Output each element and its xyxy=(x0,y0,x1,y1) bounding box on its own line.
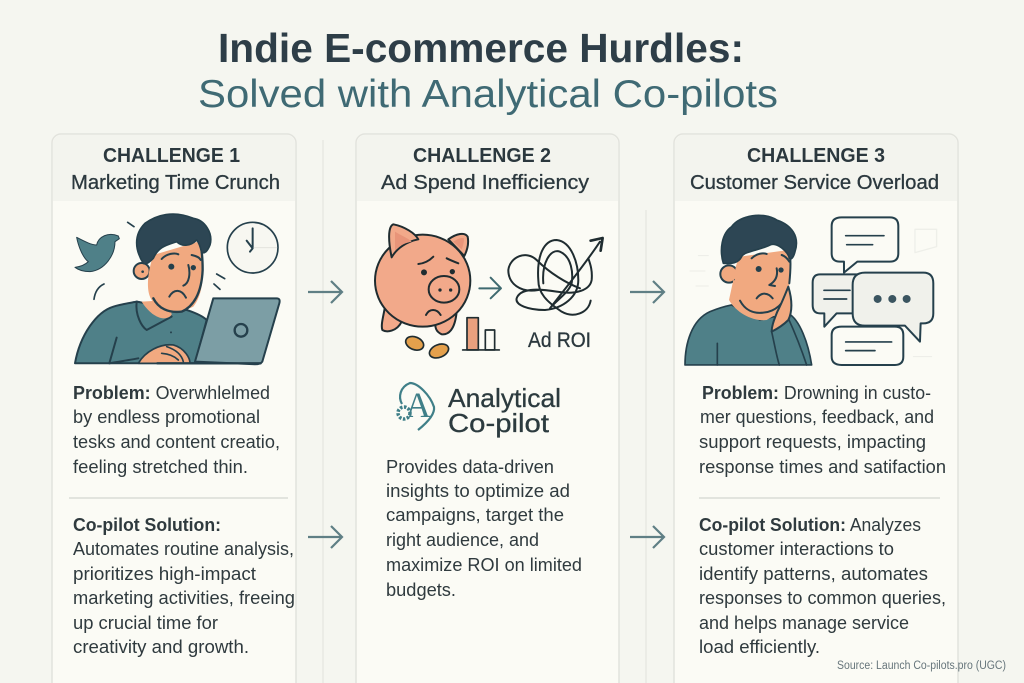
text: challenge 1 solution: marketing activities, freeing xyxy=(73,587,295,608)
text: challenge 3 problem: response times and satifaction xyxy=(699,456,946,477)
arrow: challenge 1 to 2, top xyxy=(308,281,342,303)
text: challenge 3 solution: identify patterns, automates xyxy=(699,563,928,584)
icon: laptop xyxy=(157,298,280,364)
panel: challenge 3 xyxy=(674,134,958,683)
text: challenge 3 solution xyxy=(699,514,946,657)
arrow: challenge 1 to 2, bottom xyxy=(308,526,342,548)
shirt xyxy=(75,302,207,363)
text: challenge 3 solution: customer interactions to xyxy=(699,538,894,559)
illustration: sad piggy bank to tangled ad ROI xyxy=(375,224,603,361)
icon: chat bubbles xyxy=(813,217,933,365)
text: challenge 1 problem: feeling stretched thin. xyxy=(73,456,248,477)
text: challenge 3 problem xyxy=(699,382,946,477)
text: challenge 1 solution: Automates routine analysis, xyxy=(73,538,294,559)
collar xyxy=(136,302,172,330)
arrow: challenge 2 to 3, top xyxy=(630,281,664,303)
title xyxy=(198,25,778,116)
text: challenge 3 solution: load efficiently. xyxy=(699,636,820,657)
panel: challenge 1 xyxy=(52,134,296,683)
text: challenge 1 solution: up crucial time for xyxy=(73,612,218,633)
text: challenge 1 problem xyxy=(73,382,280,477)
hair xyxy=(137,214,211,264)
arrow: piggy to scribble xyxy=(479,278,501,298)
text: challenge 1 solution: creativity and growth. xyxy=(73,636,249,657)
text: challenge 2 solution: right audience, and xyxy=(386,529,539,550)
text: challenge 3 problem: mer questions, feedback, and xyxy=(700,406,934,427)
text: challenge 1 problem: by endless promotional xyxy=(73,406,260,427)
hand on cheek xyxy=(772,287,791,332)
neck and face xyxy=(729,280,783,320)
text: challenge 2 solution: Provides data-driven xyxy=(386,456,554,477)
panel header: challenge 3: CHALLENGE 3 xyxy=(747,145,885,167)
text: challenge 3 solution: and helps manage service xyxy=(699,612,909,633)
panel header: challenge 2: Ad Spend Inefficiency xyxy=(381,172,589,194)
ear xyxy=(134,263,150,279)
text: challenge 1 solution: Co-pilot Solution: xyxy=(73,514,221,535)
text: challenge 1 problem: tesks and content creatio, xyxy=(73,431,280,452)
text: challenge 1 solution xyxy=(73,514,295,657)
logo: analytical co-pilot: Analytical xyxy=(448,383,561,413)
face details xyxy=(752,253,789,298)
illustration: overwhelmed support person xyxy=(685,215,937,365)
panel: challenge 2 xyxy=(356,134,619,683)
icon: falling coins xyxy=(404,334,451,361)
icon: head with letter A: A xyxy=(405,385,431,425)
shirt xyxy=(685,305,812,365)
text: challenge 1 solution: prioritizes high-impact xyxy=(73,563,256,584)
icon: bird xyxy=(75,234,119,272)
source note: Source: Launch Co-pilots.pro (UGC) xyxy=(837,660,1006,672)
label: Ad ROI: Ad ROI xyxy=(528,329,591,352)
icon: piggy bank xyxy=(375,224,470,334)
text: challenge 3 solution: Co-pilot Solution: Analyzes xyxy=(699,514,921,535)
text: challenge 3 solution: responses to common queries, xyxy=(699,587,946,608)
text: challenge 2 solution: campaigns, target the xyxy=(386,504,564,525)
logo: analytical co-pilot xyxy=(398,383,561,438)
illustration: stressed marketer at laptop xyxy=(75,214,280,364)
icon: head with letter A xyxy=(398,383,434,430)
panel header: challenge 1: CHALLENGE 1 xyxy=(103,145,240,167)
text: challenge 1 problem: Problem: Overwhlelmed xyxy=(73,382,270,403)
face details xyxy=(162,254,201,298)
panel header: challenge 2: CHALLENGE 2 xyxy=(413,145,551,167)
face xyxy=(148,242,203,311)
logo: analytical co-pilot: Co-pilot xyxy=(448,408,550,438)
text: challenge 3 problem: Problem: Drowning in custo- xyxy=(702,382,931,403)
text: challenge 2 solution: budgets. xyxy=(386,579,456,600)
hand xyxy=(138,345,190,363)
icon: clock xyxy=(227,222,278,273)
arrow: challenge 2 to 3, bottom xyxy=(630,526,664,548)
ear xyxy=(720,265,738,283)
text: challenge 2 solution: maximize ROI on limited xyxy=(386,554,582,575)
title: Indie E-commerce Hurdles: xyxy=(218,25,744,71)
text: challenge 3 problem: support requests, impacting xyxy=(699,431,926,452)
panel header: challenge 3 xyxy=(675,135,957,201)
panel header: challenge 1: Marketing Time Crunch xyxy=(71,172,280,194)
panel header: challenge 3: Customer Service Overload xyxy=(690,172,939,194)
text: challenge 2 solution xyxy=(386,456,582,600)
panel header: challenge 1 xyxy=(53,135,295,201)
icon: small bar chart xyxy=(463,318,499,350)
icon: tangled line with arrow xyxy=(508,238,603,315)
hair xyxy=(721,215,796,264)
title: Solved with Analytical Co-pilots xyxy=(198,73,778,116)
panel header: challenge 2 xyxy=(357,135,618,201)
text: challenge 2 solution: insights to optimize ad xyxy=(386,480,570,501)
